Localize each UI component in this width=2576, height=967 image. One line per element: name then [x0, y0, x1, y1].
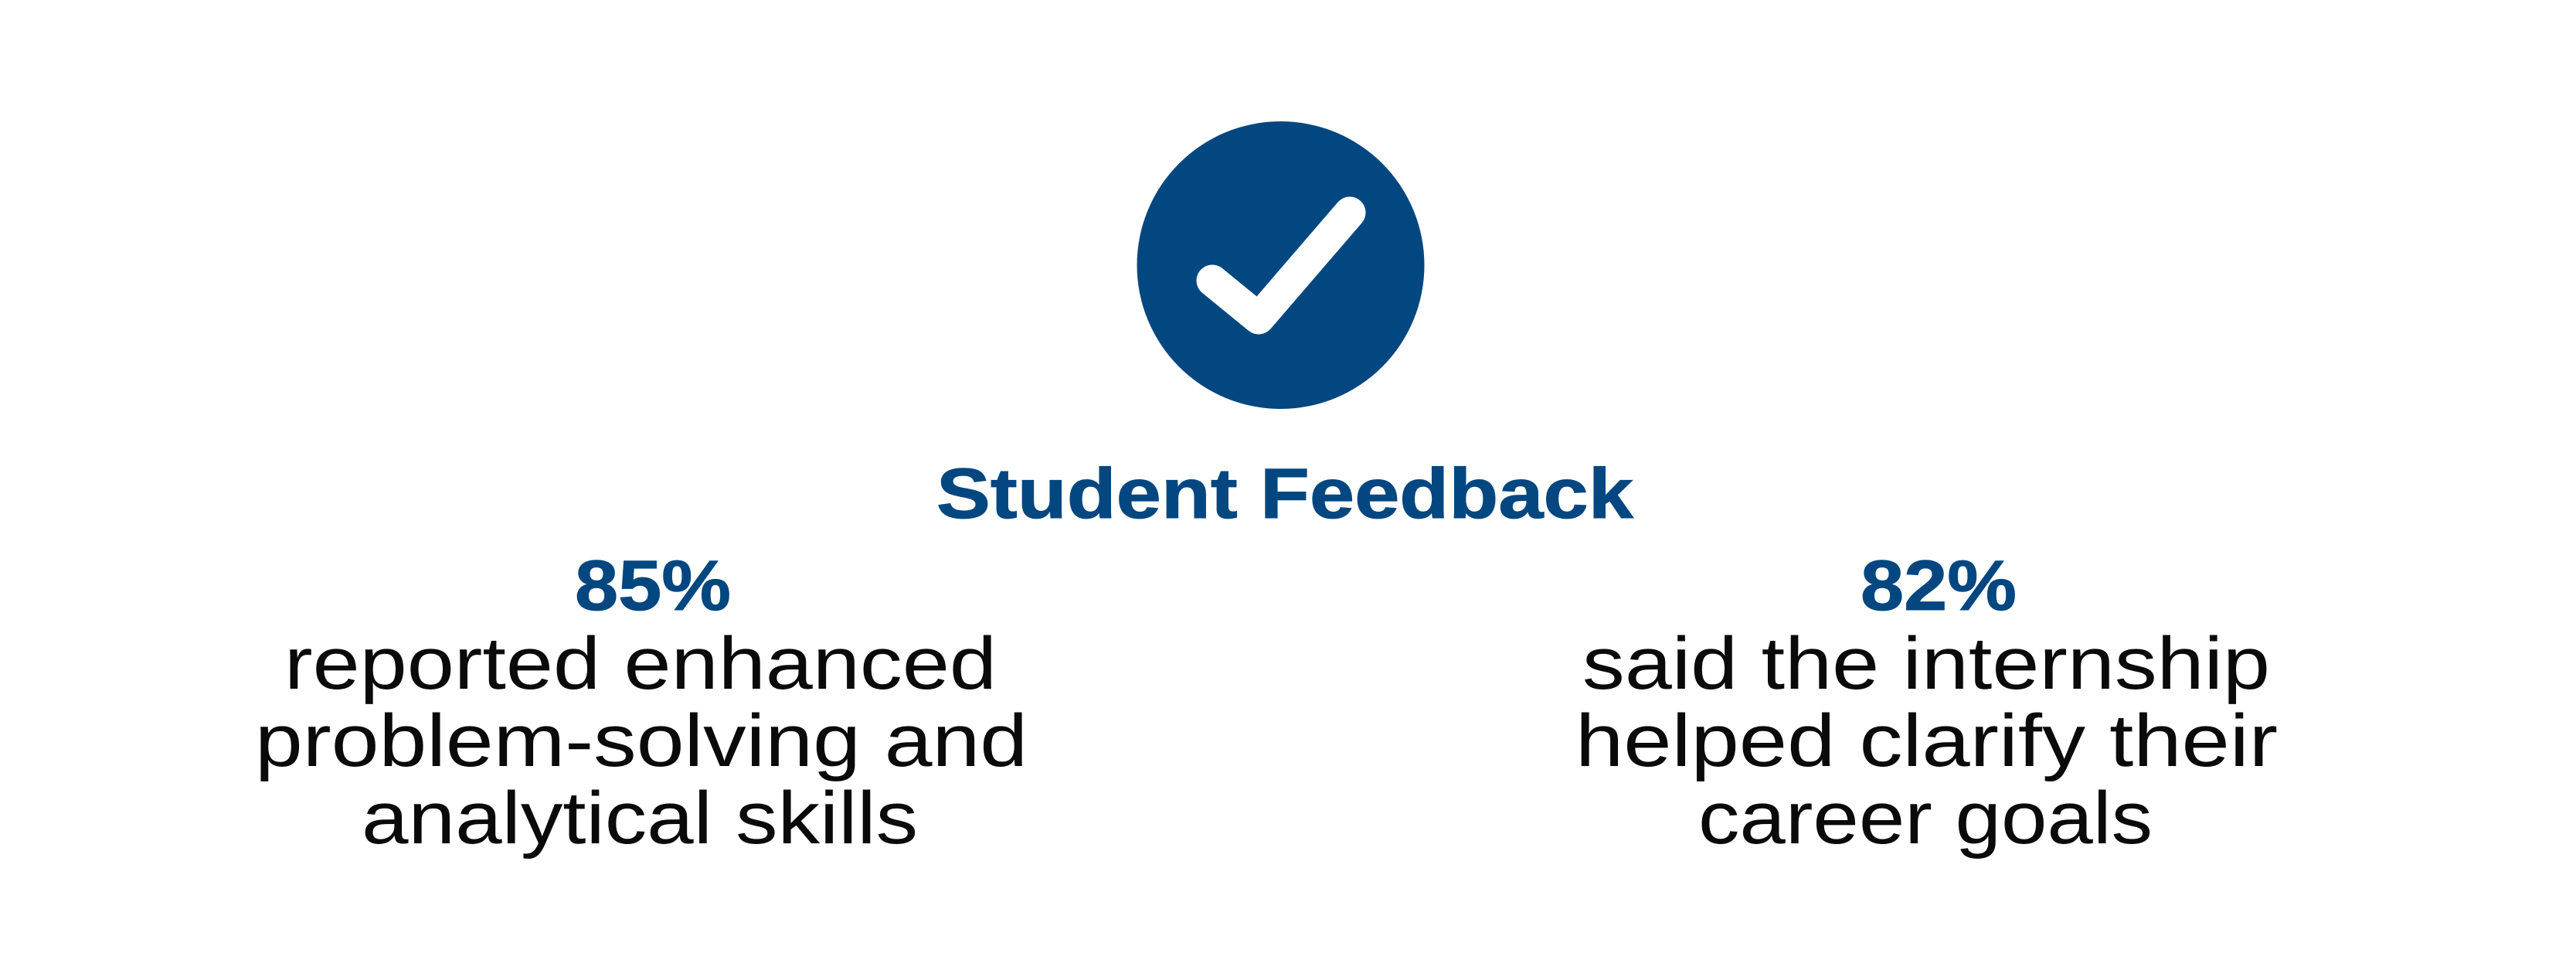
right statistic [1575, 546, 2278, 860]
right statistic description: said the internship [1582, 622, 2270, 705]
left statistic description [255, 622, 1028, 860]
right statistic description: career goals [1698, 777, 2153, 860]
statistic value: 82%: 82% [1861, 546, 2017, 625]
statistic value: 85%: 85% [575, 546, 731, 625]
icon: check mark in circle [1137, 121, 1425, 409]
left statistic description: analytical skills [362, 777, 918, 860]
left statistic [255, 546, 1028, 860]
left statistic description: problem-solving and [255, 700, 1028, 782]
right statistic description [1575, 622, 2278, 860]
right statistic description: helped clarify their [1575, 700, 2278, 782]
left statistic description: reported enhanced [284, 622, 997, 705]
heading: Student Feedback: Student Feedback [936, 455, 1634, 533]
